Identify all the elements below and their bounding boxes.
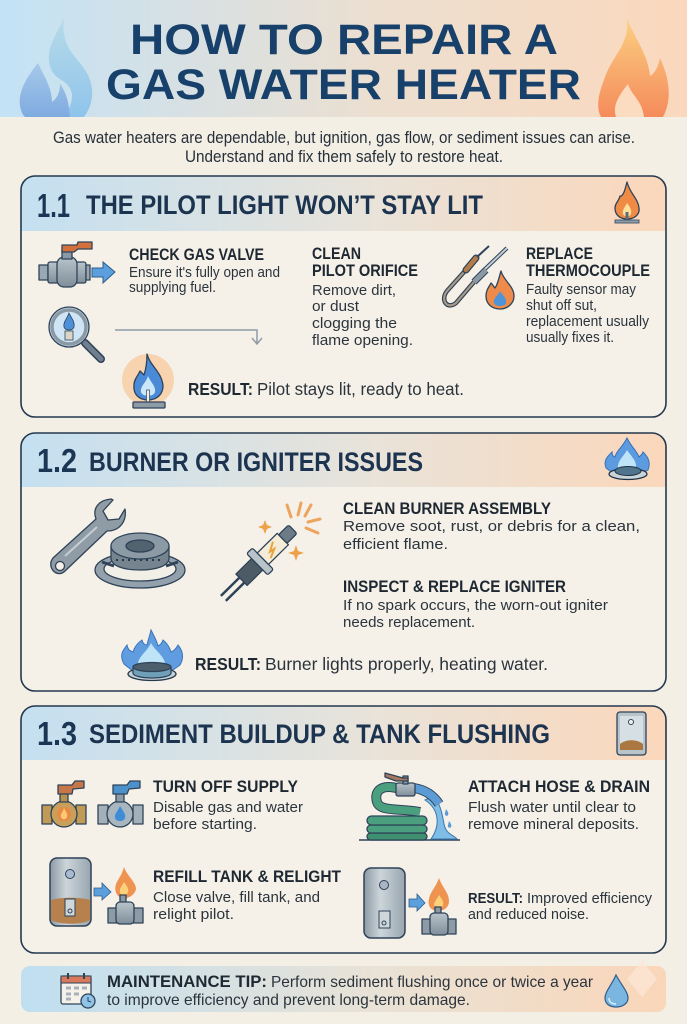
heading 1.2: 1.2	[37, 442, 77, 479]
icon: garden hose draining	[359, 773, 460, 840]
panel: maintenance tip	[21, 961, 666, 1012]
heading 1.1: THE PILOT LIGHT WON’T STAY LIT	[86, 190, 483, 220]
heading 1.3: SEDIMENT BUILDUP & TANK FLUSHING	[89, 719, 550, 749]
icon: lit burner	[122, 630, 182, 680]
title: GAS WATER HEATER	[106, 61, 581, 109]
icon: tank with sediment header	[617, 712, 646, 755]
heading 1.3: 1.3	[37, 715, 77, 752]
step: refill tank and relight	[153, 868, 341, 923]
step: replace thermocouple: Faulty sensor may	[526, 281, 636, 298]
step: turn off supply	[153, 778, 303, 833]
step: refill tank and relight: REFILL TANK & RELIGHT	[153, 868, 341, 886]
icon: clean tank, arrow and flame	[364, 868, 456, 938]
step: inspect and replace igniter: needs replacement.	[343, 614, 475, 631]
icon: orange flame	[598, 19, 669, 117]
step: clean pilot orifice: Remove dirt,	[312, 282, 396, 299]
icon: blue flame	[20, 18, 92, 117]
heading 1.1	[37, 187, 483, 224]
step: check gas valve: CHECK GAS VALVE	[129, 246, 264, 264]
intro text: Understand and fix them safely to restore heat.	[185, 148, 503, 166]
step: replace thermocouple: shut off sut,	[526, 297, 597, 314]
icon: gas valve with arrow	[39, 242, 115, 287]
step: clean pilot orifice: or dust	[312, 298, 360, 315]
step: replace thermocouple: THERMOCOUPLE	[526, 262, 650, 280]
title	[106, 16, 581, 109]
heading 1.2	[37, 442, 423, 479]
icon: thermocouple with flame	[444, 246, 514, 309]
step: refill tank and relight: Close valve, fill tank, and	[153, 889, 320, 906]
icon: wrench	[51, 499, 125, 574]
header banner	[0, 0, 687, 117]
step: clean pilot orifice: flame opening.	[312, 332, 413, 349]
step: inspect and replace igniter: INSPECT & REPLACE IGNITER	[343, 578, 566, 596]
step: clean pilot orifice: CLEAN	[312, 245, 361, 263]
tip text: to improve efficiency and prevent long-term damage.	[107, 992, 470, 1009]
step: attach hose and drain	[468, 778, 650, 833]
step: clean pilot orifice	[312, 245, 418, 349]
step: inspect and replace igniter: If no spark occurs, the worn-out igniter	[343, 597, 608, 614]
result 1.3: and reduced noise.	[468, 906, 589, 923]
result 1.3	[468, 890, 652, 923]
step: attach hose and drain: Flush water until clear to	[468, 799, 636, 816]
icon: water valve	[98, 781, 143, 827]
heading 1.1: 1.1	[37, 187, 70, 224]
panel: 1.1 pilot light	[21, 176, 666, 417]
icon: burner header	[605, 438, 649, 480]
step: clean burner assembly	[343, 500, 640, 553]
tip text: Perform sediment flushing once or twice a year	[271, 974, 594, 991]
step: turn off supply: before starting.	[153, 816, 257, 833]
result 1.3: Improved efficiency	[527, 890, 652, 907]
heading 1.3	[37, 715, 550, 752]
icon: burner assembly	[95, 533, 185, 588]
step: attach hose and drain: ATTACH HOSE & DRAIN	[468, 778, 650, 796]
step: replace thermocouple	[526, 245, 650, 346]
step: replace thermocouple: replacement usually	[526, 313, 649, 330]
step: turn off supply: TURN OFF SUPPLY	[153, 778, 298, 796]
step: clean burner assembly: CLEAN BURNER ASSEMBLY	[343, 500, 551, 518]
step: check gas valve: Ensure it's fully open and	[129, 264, 280, 281]
step: clean pilot orifice: clogging the	[312, 315, 397, 332]
intro text: Gas water heaters are dependable, but ignition, gas flow, or sediment issues can arise.	[53, 129, 635, 147]
tip text: MAINTENANCE TIP:	[107, 972, 267, 991]
icon: magnifier over pilot flame	[49, 307, 101, 359]
step: replace thermocouple: REPLACE	[526, 245, 593, 263]
icon: tank with sediment, arrow and flame	[50, 858, 143, 926]
step: turn off supply: Disable gas and water	[153, 799, 303, 816]
step: replace thermocouple: usually fixes it.	[526, 329, 614, 346]
step: check gas valve	[129, 246, 280, 296]
icon: water drop	[605, 975, 628, 1007]
panel: 1.3 sediment buildup	[21, 706, 666, 953]
icon: gas valve	[42, 781, 86, 827]
step: attach hose and drain: remove mineral deposits.	[468, 816, 639, 833]
arrow: thin connector	[115, 330, 262, 344]
step: check gas valve: supplying fuel.	[129, 279, 216, 296]
result 1.2: RESULT:	[195, 654, 261, 674]
step: refill tank and relight: relight pilot.	[153, 906, 234, 923]
title: HOW TO REPAIR A	[130, 16, 558, 64]
step: clean burner assembly: Remove soot, rust, or debris for a clean,	[343, 518, 640, 535]
result 1.1: Pilot stays lit, ready to heat.	[257, 379, 464, 399]
icon: pilot flame header	[615, 182, 639, 223]
step: clean pilot orifice: PILOT ORIFICE	[312, 262, 418, 280]
step: clean burner assembly: efficient flame.	[343, 536, 448, 553]
intro text	[53, 129, 635, 166]
result 1.1: RESULT:	[188, 379, 253, 399]
result 1.3: RESULT:	[468, 890, 523, 907]
icon: calendar and clock	[61, 973, 95, 1008]
panel: 1.2 burner or igniter	[21, 433, 666, 691]
icon: igniter with sparks	[212, 503, 320, 609]
icon: gas and water valves	[42, 781, 143, 827]
icon: sparkle	[627, 961, 657, 997]
result 1.2: Burner lights properly, heating water.	[265, 654, 548, 674]
heading 1.2: BURNER OR IGNITER ISSUES	[89, 447, 423, 477]
icon: blue pilot flame	[122, 354, 174, 408]
tip text	[107, 972, 594, 1009]
step: inspect and replace igniter	[343, 578, 608, 631]
